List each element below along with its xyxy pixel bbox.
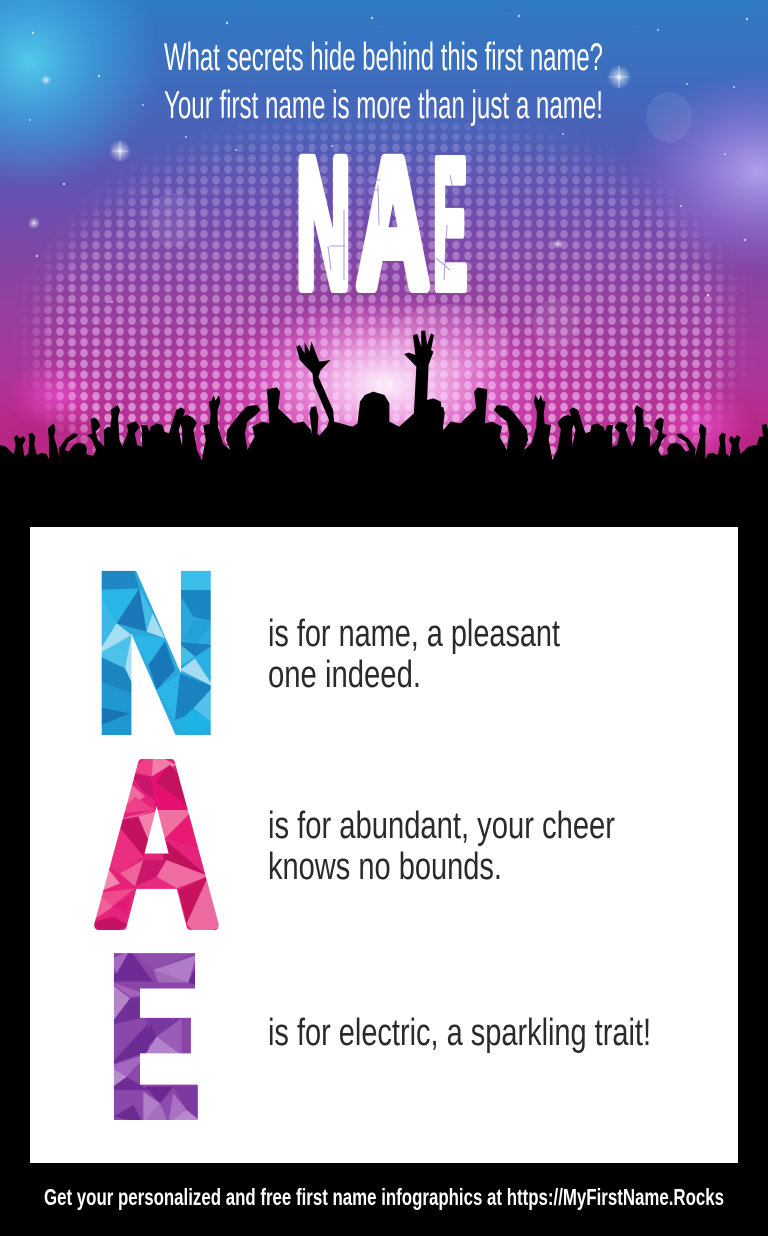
big name NAE: A [357, 121, 429, 325]
text for A [268, 805, 615, 888]
bottom black band [0, 470, 768, 1236]
name scratches [328, 170, 456, 280]
mosaic letter E: E [108, 910, 200, 1164]
text for N: is for name, a pleasant [268, 613, 560, 655]
big name NAE: N [296, 121, 350, 325]
text for N: one indeed. [268, 654, 421, 696]
mosaic letter A: A [94, 713, 220, 975]
crowd silhouette [0, 331, 768, 500]
text for E: is for electric, a sparkling trait! [268, 1012, 651, 1054]
text for A: knows no bounds. [268, 846, 502, 888]
mosaic letter N: N [94, 528, 218, 778]
central figure with raised hands [294, 331, 470, 470]
dot grid lights [25, 112, 745, 460]
white content panel [30, 527, 738, 1164]
infographic canvas: E [433, 121, 468, 328]
sparkles [28, 15, 748, 303]
stage background [0, 0, 768, 510]
text for A: is for abundant, your cheer [268, 805, 615, 847]
heading [164, 36, 603, 127]
right edge crowd [749, 424, 768, 500]
text for N [268, 613, 560, 696]
